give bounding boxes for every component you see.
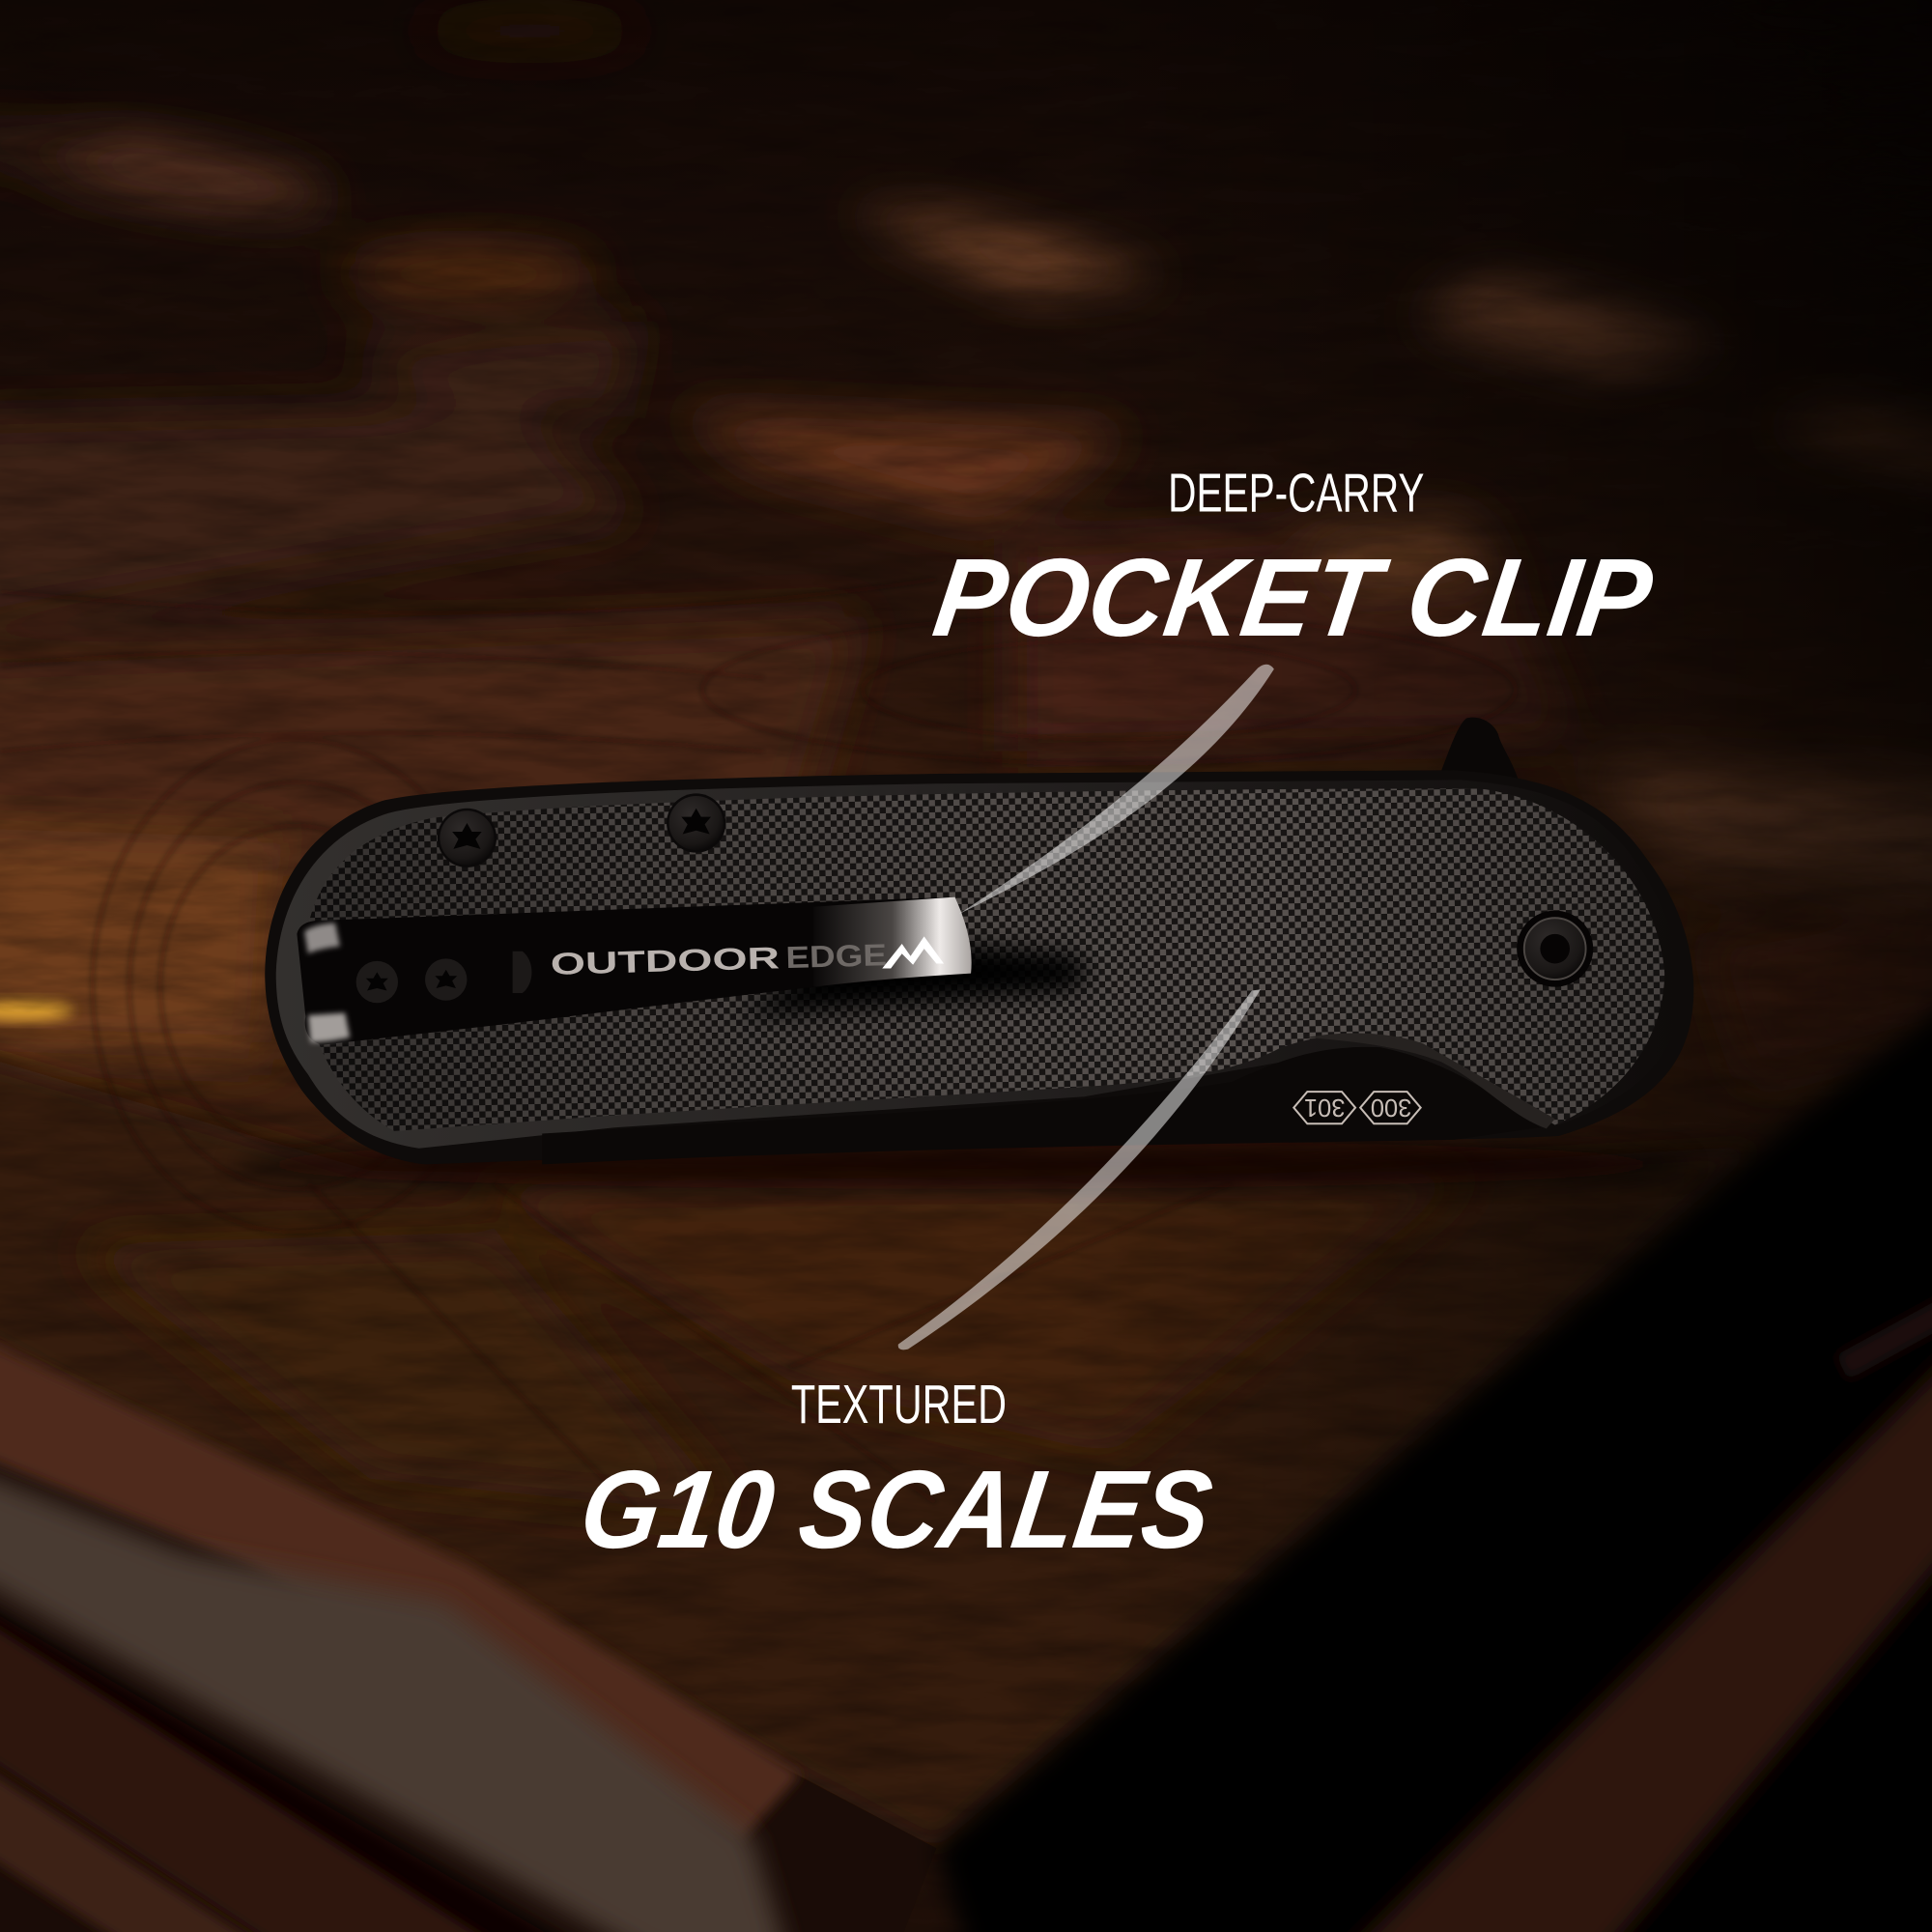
bottom-left plank	[0, 1337, 936, 1932]
clip bottom bend highlight	[308, 1012, 350, 1042]
handle bezel	[276, 780, 1681, 1149]
flipper tab	[1439, 718, 1518, 779]
blade steel stamp: 301	[1304, 1094, 1345, 1121]
blade steel stamp	[1293, 1092, 1421, 1123]
heading: G10 scales: G10 SCALES	[573, 1449, 1219, 1572]
clip screw 2	[425, 958, 467, 1001]
pivot screw right	[1517, 911, 1593, 987]
knife shadow	[234, 1140, 1688, 1189]
blade edge area	[542, 1047, 1540, 1164]
label: deep-carry: DEEP-CARRY	[1168, 462, 1424, 523]
knife	[234, 718, 1693, 1189]
handle screw top middle	[667, 793, 725, 853]
clip screw 1	[356, 961, 398, 1003]
table surface	[0, 1047, 1762, 1848]
callout: deep-carry pocket clip	[927, 462, 1660, 660]
clip shine	[813, 897, 972, 987]
orange highlight on the wood	[0, 999, 74, 1021]
wood grain rings	[0, 579, 1516, 1516]
leader line: pocket clip	[958, 665, 1274, 914]
clip logo: OUTDOOR	[550, 940, 781, 981]
handle screw top left	[438, 809, 497, 867]
G10 textured scale	[283, 777, 1676, 1146]
finger choil bevel	[1306, 1034, 1555, 1128]
dark bottom-right edge	[936, 985, 1932, 1932]
callout: textured G10 scales	[573, 1374, 1219, 1572]
heading: pocket clip: POCKET CLIP	[927, 537, 1660, 660]
clip logo	[550, 937, 887, 981]
leader line: G10 scales	[898, 989, 1261, 1350]
blade steel stamp: 300	[1371, 1094, 1411, 1121]
clip logo mountains	[882, 936, 944, 969]
handle body	[265, 770, 1693, 1164]
clip shadow	[739, 936, 1088, 1016]
pocket clip	[297, 897, 972, 1045]
clip top bend highlight	[304, 923, 340, 953]
clip washer edge	[513, 952, 531, 993]
label: textured: TEXTURED	[791, 1374, 1007, 1435]
clip logo: EDGE	[785, 937, 887, 975]
